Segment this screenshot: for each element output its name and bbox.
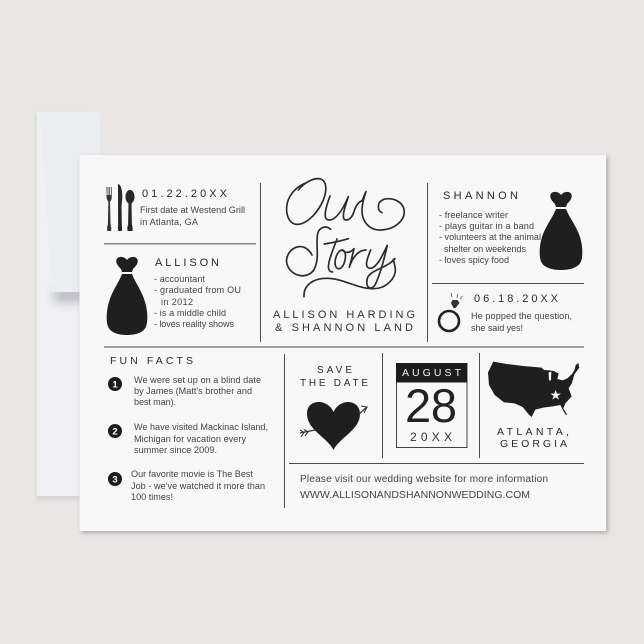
fact 1 [108,375,261,407]
Allison bio: - graduated from OU [154,285,241,295]
Shannon bio: - freelance writer [439,210,508,220]
Allison bio: in 2012 [161,297,193,307]
first date block: in Atlanta, GA [140,217,199,227]
save the date: SAVE [317,365,352,376]
icon: ring [439,293,462,331]
Shannon bio: - volunteers at the animal [439,232,541,242]
Shannon bio: - loves spicy food [439,255,509,265]
icon: USA map [488,362,579,417]
proposal block: 06.18.20XX [474,293,559,305]
website note [300,474,548,501]
fact 2: We have visited Mackinac Island, [134,422,268,432]
couple names: ALLISON HARDING [273,309,415,321]
location: ATLANTA, [497,426,569,438]
fact 2 [108,422,268,455]
proposal block [471,293,572,333]
website note: Please visit our wedding website for more information [300,474,548,485]
calendar [396,363,467,448]
fact 3: 3 [112,474,118,486]
fact 2: Michigan for vacation every [134,434,246,444]
envelope [36,112,100,500]
calendar: 28 [405,379,457,432]
Allison bio: ALLISON [155,257,219,269]
fact 2: 2 [112,426,118,438]
fact 1: by James (Matt's brother and [134,386,252,396]
location [497,426,569,450]
first date block: 01.22.20XX [142,188,228,200]
couple names: & SHANNON LAND [275,322,413,334]
Allison bio: - is a middle child [154,308,226,318]
icon: Shannon dress [540,192,582,270]
card [80,155,608,533]
first date block: First date at Westend Grill [140,205,245,215]
fact 3 [108,469,265,502]
calendar: 20XX [410,430,452,444]
divider lines [104,183,584,508]
fact 1: We were set up on a blind date [134,375,261,385]
Allison bio: - loves reality shows [154,319,234,329]
fun facts heading: FUN FACTS [110,355,193,367]
Allison bio [154,257,241,329]
Shannon bio: - plays guitar in a band [439,221,534,231]
proposal block: she said yes! [471,323,523,333]
website note: WWW.ALLISONANDSHANNONWEDDING.COM [300,489,530,501]
Allison bio: - accountant [154,274,205,284]
proposal block: He popped the question, [471,311,572,321]
save the date: THE DATE [300,378,368,389]
Shannon bio: SHANNON [443,190,518,202]
Shannon bio: shelter on weekends [444,244,526,254]
fact 2: summer since 2009. [134,445,217,455]
Shannon bio [439,190,541,265]
save the date [300,365,368,389]
title: Our Story script [287,179,404,297]
location: GEORGIA [500,438,567,450]
fact 1: 1 [112,380,118,390]
fact 3: Our favorite movie is The Best [131,469,253,479]
calendar: AUGUST [402,367,462,379]
couple names [273,309,415,334]
fact 1: best man). [134,397,176,407]
first date block [140,188,245,227]
icon: Allison dress [107,257,147,335]
icon: heart with arrow [300,402,367,450]
fact 3: 100 times! [131,492,173,502]
fact 3: Job - we've watched it more than [131,481,265,491]
icon: cutlery [106,184,134,231]
